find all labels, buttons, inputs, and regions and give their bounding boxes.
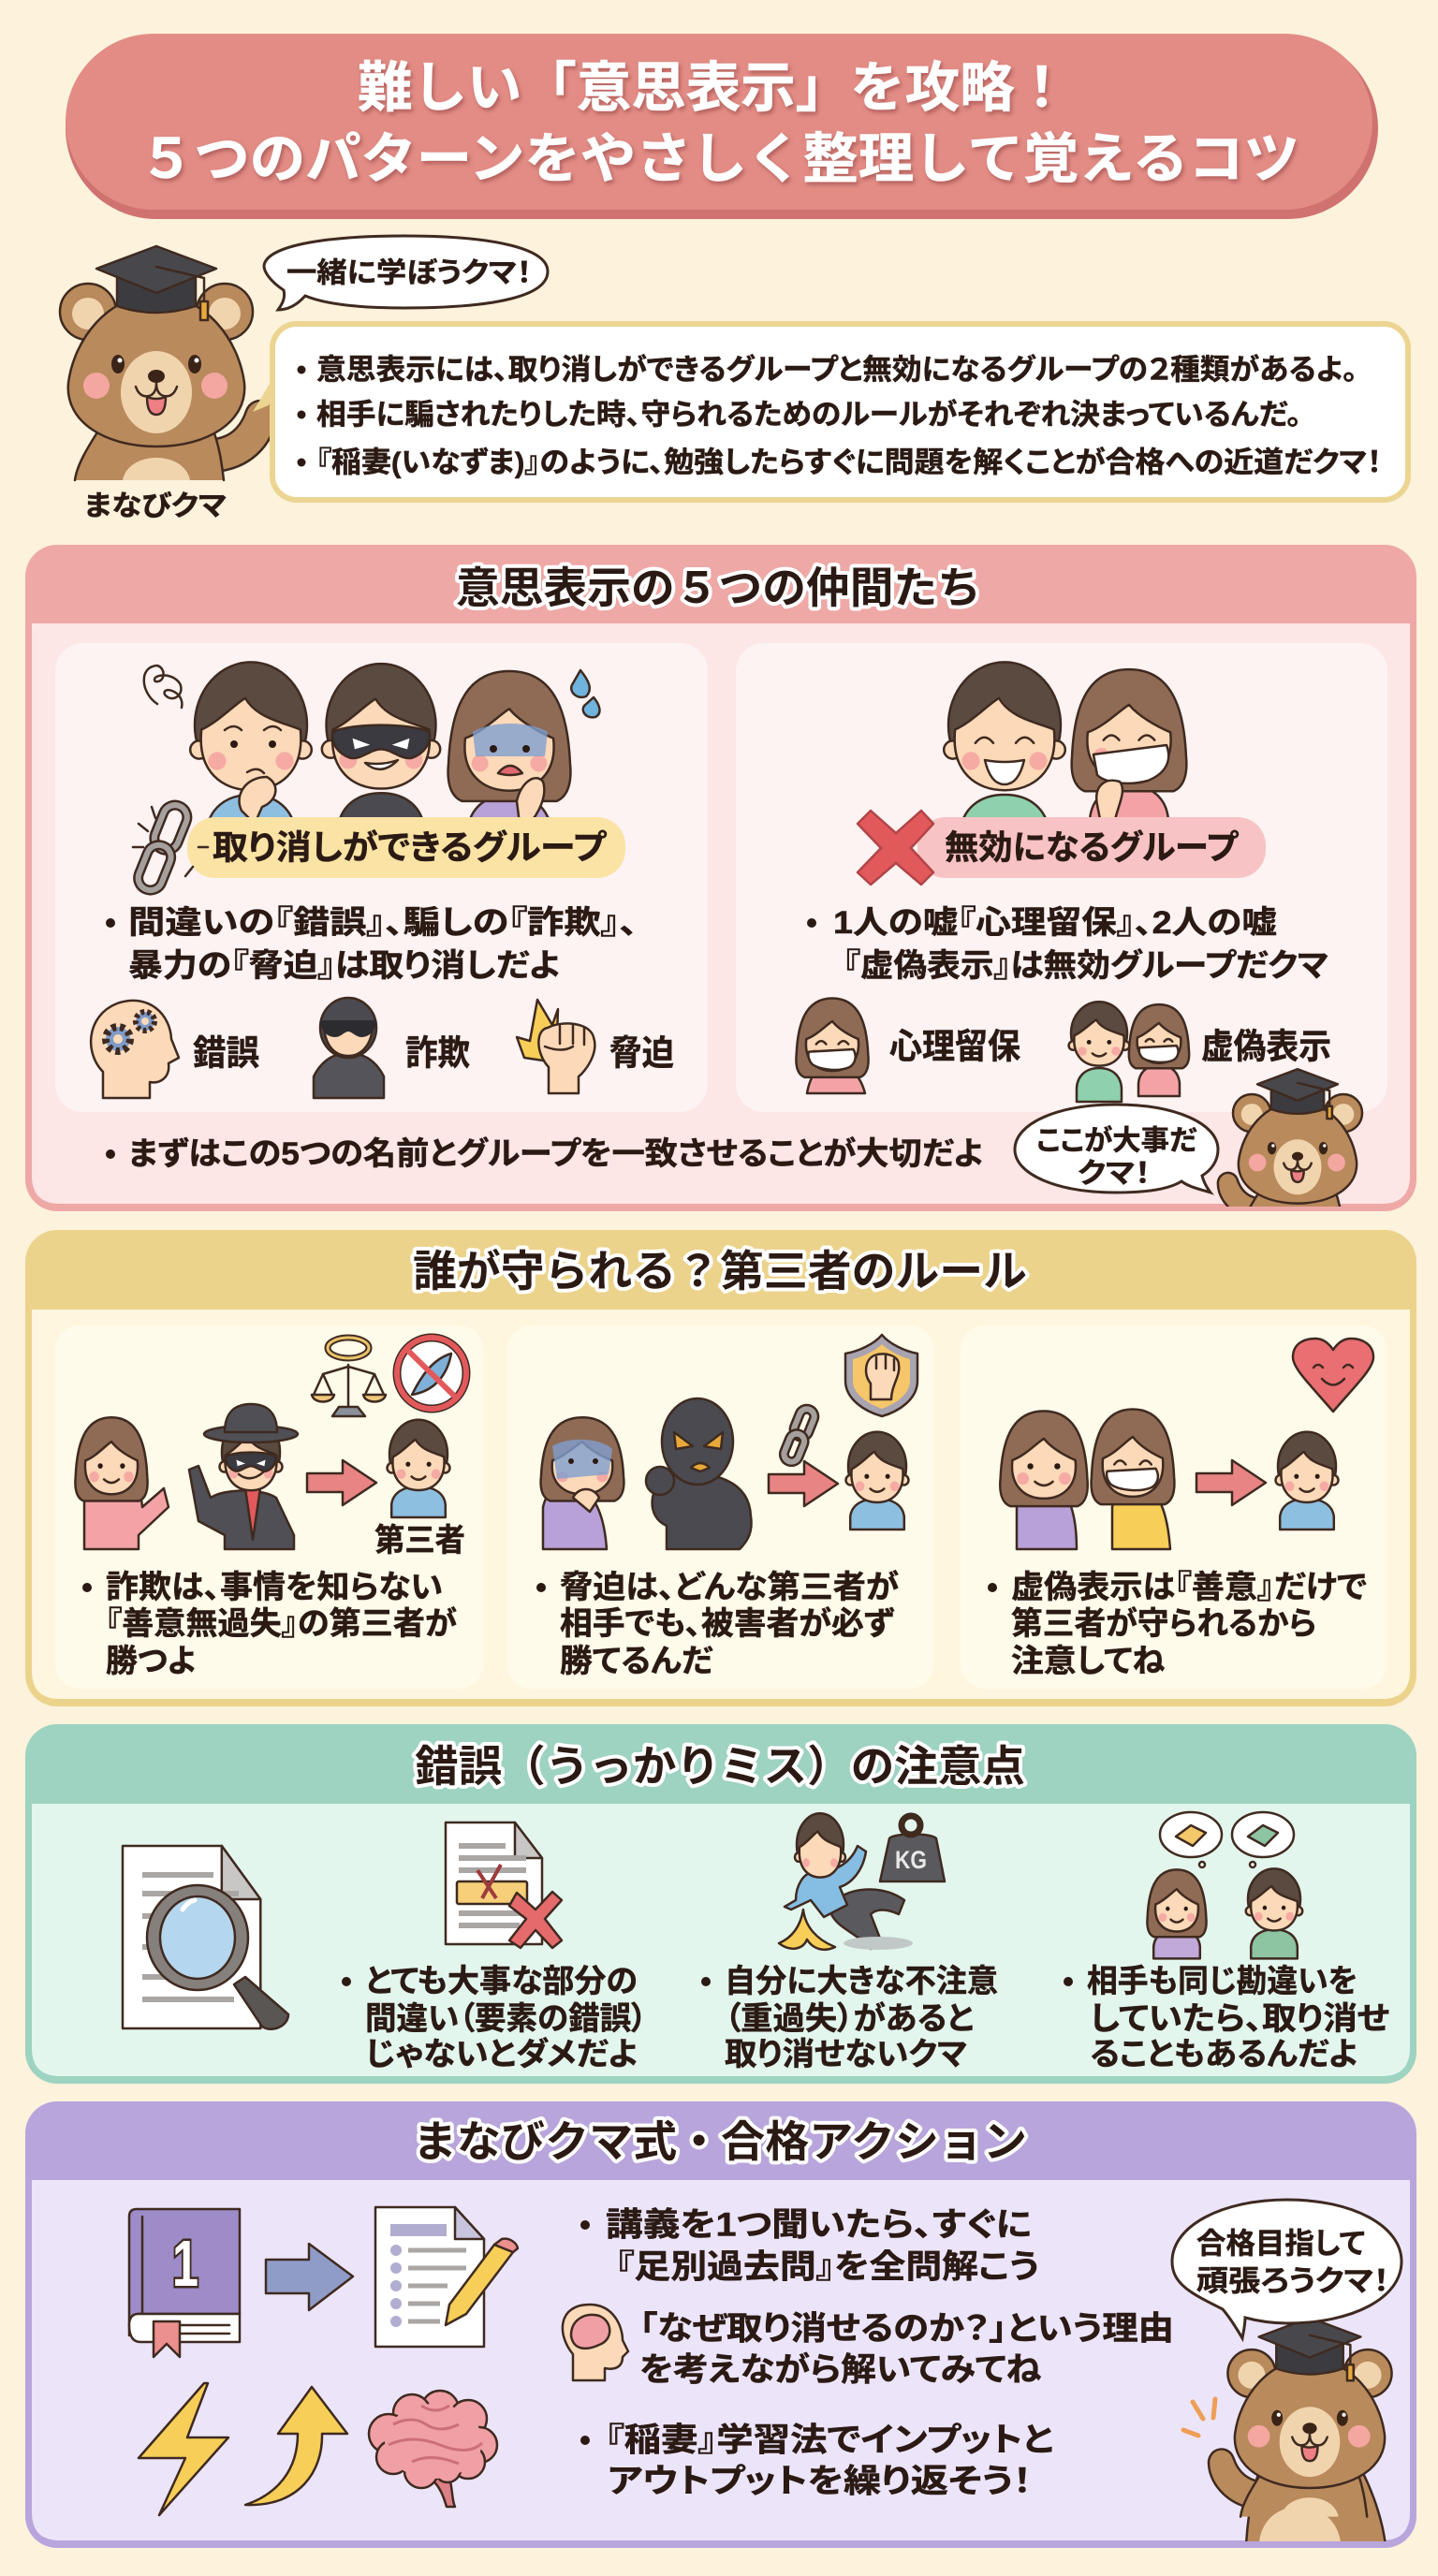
- icon: slipping man with weight: KG: [895, 1846, 927, 1874]
- illustration: woman: [1000, 1411, 1088, 1549]
- illustration: woman and man: [1147, 1868, 1302, 1958]
- icon: masked woman 心理留保: [796, 999, 869, 1093]
- icon: slipping man with weight: [779, 1813, 945, 1950]
- icon: two people with thought bubbles: [1160, 1812, 1294, 1867]
- icon: shield with fist: [845, 1335, 917, 1416]
- text: group description: 『虚偽表示』は無効グループだクマ: [844, 948, 1328, 984]
- mascot: bear cheering: [1209, 2318, 1392, 2546]
- illustration: woman: [75, 1417, 169, 1549]
- text: column 3: ることもあるんだよ: [1090, 2037, 1357, 2072]
- text: column 3: 相手も同じ勘違いを: [1087, 1964, 1357, 1999]
- icon: brain: [369, 2391, 497, 2507]
- icon: worksheet and pencil: [375, 2207, 518, 2347]
- text: 脅迫は、どんな第三者が: [560, 1569, 899, 1605]
- mascot: まなびクマ: [60, 246, 275, 522]
- title line 2: ５つのパターンをやさしく整理して覚えるコツ: [139, 129, 1299, 189]
- illustration: three people: [144, 662, 599, 862]
- group label: 無効になるグループ: [945, 827, 1240, 867]
- icon: document with X: [446, 1822, 562, 1948]
- text: column 2: [701, 1964, 998, 2072]
- text: 勝てるんだ: [560, 1644, 713, 1679]
- illustration: masked attacker: [646, 1398, 752, 1549]
- illustration: third party: [846, 1432, 908, 1530]
- text: 詐欺は、事情を知らない: [106, 1570, 443, 1605]
- text: group description: 暴力の『脅迫』は取り消しだよ: [128, 948, 560, 984]
- text: column 2: 自分に大きな不注意: [725, 1964, 998, 1999]
- panel: 第三者のルール: [25, 1230, 1416, 1706]
- text: action 3: 『稲妻』学習法でインプットと: [606, 2422, 1053, 2458]
- text: 『善意無過失』の第三者が: [106, 1605, 457, 1642]
- speech bubble: greeting: 一緒に学ぼうクマ！: [286, 258, 532, 288]
- icon: head with brain: [563, 2305, 628, 2380]
- icon: lightning bolt: [139, 2383, 228, 2515]
- title banner: [66, 34, 1378, 219]
- label: 心理留保: 心理留保: [889, 1028, 1020, 1065]
- text: column 3: [1064, 1964, 1389, 2072]
- text: group description: 1人の嘘『心理留保』、2人の嘘: [833, 905, 1277, 941]
- illustration: third party: [388, 1420, 449, 1517]
- card: 詐欺: [55, 1325, 483, 1689]
- text: [536, 1569, 899, 1679]
- speech bubble: 合格目指して頑張ろうクマ！: 頑張ろうクマ！: [1196, 2265, 1389, 2297]
- panel: 合格アクション: [25, 2101, 1416, 2548]
- speech bubble: greeting: [264, 236, 548, 310]
- text: 注意してね: [1011, 1644, 1165, 1679]
- text: column 1: 間違い（要素の錯誤）: [365, 2001, 647, 2037]
- text: column 2: （重過失）があると: [725, 2000, 974, 2037]
- card: 無効になるグループ: [736, 643, 1387, 1112]
- text: action 3: アウトプットを繰り返そう！: [608, 2464, 1032, 2499]
- text: action 3: [580, 2422, 1053, 2499]
- icon: two people 虚偽表示: [1069, 1002, 1189, 1102]
- text: column 3: していたら、取り消せ: [1090, 2001, 1389, 2037]
- title line 1: 難しい「意思表示」を攻略！: [358, 58, 1069, 118]
- text: group description: 間違いの『錯誤』、騙しの『詐欺』、: [128, 905, 638, 941]
- group label: 取り消しができるグループ: [213, 827, 608, 867]
- illustration: two people: [944, 662, 1186, 862]
- text: column 1: じゃないとダメだよ: [365, 2036, 638, 2072]
- text: 第三者が守られるから: [1011, 1605, 1316, 1642]
- text: 勝つよ: [106, 1644, 196, 1679]
- illustration: frightened woman: [541, 1417, 624, 1549]
- text: action 2: を考えながら解いてみてね: [639, 2351, 1041, 2389]
- text: column 1: [342, 1964, 647, 2072]
- icon: document with magnifier: [123, 1846, 288, 2029]
- icon: no fish: [397, 1338, 466, 1409]
- speech bubble: 合格目指して頑張ろうクマ！: [1172, 2200, 1401, 2338]
- label: 脅迫: 脅迫: [609, 1033, 674, 1073]
- text: group description: [807, 905, 1328, 984]
- icon: book: 1: [172, 2227, 198, 2300]
- arrow: [307, 1460, 376, 1505]
- text: 虚偽表示は『善意』だけで: [1011, 1570, 1367, 1605]
- panel: 意思表示の5つの仲間たち: [25, 545, 1416, 1226]
- icon: broken chain: [782, 1407, 816, 1464]
- text: bottom note: まずはこの5つの名前とグループを一致させることが大切だよ: [128, 1135, 983, 1172]
- mascot name: まなびクマ: [84, 490, 227, 522]
- icon: red X: [858, 811, 933, 885]
- card: 取り消しができるグループ: [55, 643, 708, 1112]
- speech bubble: ここが大事だクマ！: [1015, 1105, 1218, 1193]
- heading: 錯誤（うっかりミス）の注意点: [415, 1742, 1025, 1791]
- panel: 錯誤の注意点: [25, 1724, 1416, 2084]
- heading: 意思表示の５つの仲間たち: [456, 564, 981, 612]
- icon: brain head 錯誤: [91, 1001, 179, 1098]
- label: 虚偽表示: 虚偽表示: [1201, 1028, 1331, 1065]
- illustration: masked woman: [1092, 1409, 1174, 1549]
- text: 相手でも、被害者が必ず: [560, 1605, 895, 1642]
- card: 虚偽表示: [961, 1325, 1387, 1689]
- group label pill: [917, 817, 1266, 878]
- text: action 2: [639, 2310, 1174, 2389]
- label: 錯誤: 錯誤: [193, 1033, 259, 1073]
- group label pill: [187, 817, 625, 878]
- text: action 1: 『足別過去問』を全問解こう: [616, 2248, 1039, 2286]
- text: [988, 1570, 1367, 1679]
- intro text box: [253, 324, 1408, 500]
- speech bubble: ここが大事だクマ！: ここが大事だ: [1036, 1125, 1196, 1157]
- mascot: bear small: [1218, 1069, 1362, 1226]
- arrow: [769, 1461, 838, 1506]
- icon: fist 脅迫: [517, 1000, 594, 1093]
- arrow: [266, 2244, 353, 2310]
- card: 脅迫: [507, 1325, 933, 1689]
- icon: book: [129, 2209, 240, 2357]
- icon: rising arrow: [245, 2387, 347, 2505]
- heading: まなびクマ式・合格アクション: [413, 2117, 1027, 2166]
- intro bullet 3: 『稲妻(いなずま)』のように、勉強したらすぐに問題を解くことが合格への近道だクマ！: [316, 446, 1382, 479]
- intro bullet 2: 相手に騙されたりした時、守られるためのルールがそれぞれ決まっているんだ。: [316, 399, 1301, 431]
- icon: thief 詐欺: [314, 998, 384, 1098]
- text: column 1: とても大事な部分の: [365, 1964, 638, 1999]
- speech bubble: ここが大事だクマ！: クマ！: [1078, 1159, 1151, 1189]
- icon: broken chain: [133, 801, 208, 894]
- icon: smiling heart: [1293, 1339, 1373, 1412]
- icon: scale with halo: [312, 1338, 386, 1416]
- text: action 1: [580, 2207, 1039, 2286]
- text: group description: [106, 905, 638, 984]
- icon: sparkle lines: [1183, 2399, 1215, 2436]
- text: [82, 1570, 457, 1679]
- text: action 2: 「なぜ取り消せるのか？」という理由: [639, 2310, 1174, 2348]
- text: column 2: 取り消せないクマ: [725, 2037, 967, 2072]
- text: action 1: 講義を1つ聞いたら、すぐに: [606, 2207, 1032, 2243]
- speech bubble: 合格目指して頑張ろうクマ！: 合格目指して: [1196, 2228, 1365, 2260]
- icon: sweat drops: [571, 670, 599, 717]
- arrow: [1196, 1460, 1266, 1505]
- illustration: swindler: [189, 1404, 298, 1549]
- label: 詐欺: 詐欺: [405, 1033, 470, 1073]
- label: 第三者: 第三者: [374, 1523, 465, 1559]
- intro bullet 1: 意思表示には、取り消しができるグループと無効になるグループの２種類があるよ。: [316, 354, 1357, 386]
- illustration: third party: [1276, 1432, 1338, 1530]
- icon: spiral: [144, 666, 182, 708]
- heading: 誰が守られる？第三者のルール: [413, 1247, 1027, 1295]
